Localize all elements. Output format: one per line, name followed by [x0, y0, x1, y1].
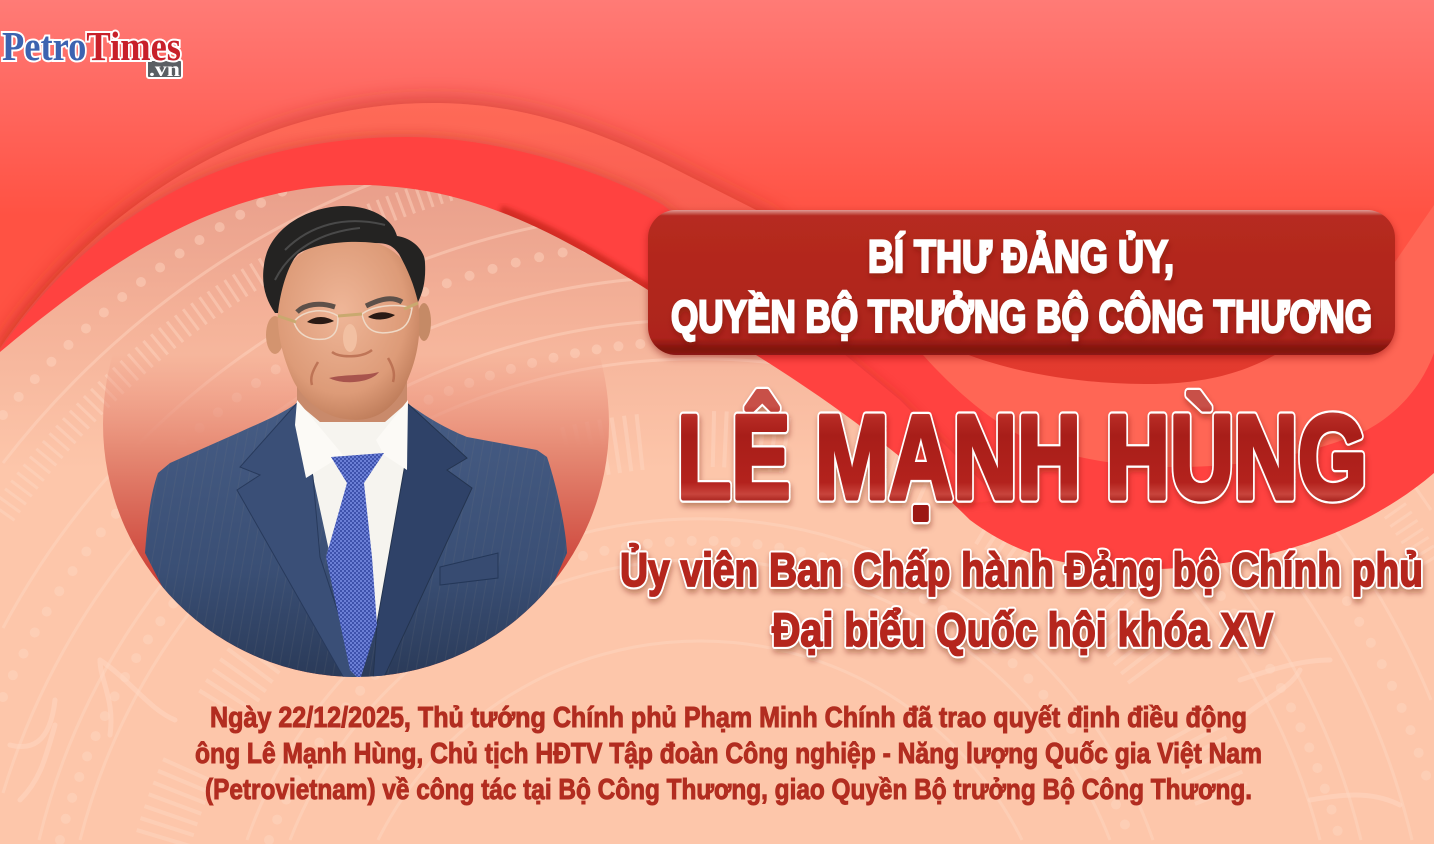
shirt — [296, 402, 412, 680]
left lapel — [237, 403, 360, 680]
glasses bridge and temples — [278, 303, 418, 322]
shirt collar — [295, 400, 408, 478]
necktie — [326, 453, 384, 680]
suit jacket — [145, 403, 567, 680]
paragraph line 1: Ngày 22/12/2025, Thủ tướng Chính phủ Phạm Minh Chính đã trao quyết định điều động — [210, 702, 1247, 734]
background: dark blob under banner — [900, 200, 1310, 384]
portrait — [103, 171, 609, 680]
eyebrows — [297, 299, 402, 312]
background: top gradient — [0, 0, 1434, 400]
subtitle fill line 2: Đại biểu Quốc hội khóa XV — [772, 603, 1274, 656]
paragraph line 3: (Petrovietnam) về công tác tại Bộ Công Thương, giao Quyền Bộ trưởng Bộ Công Thương. — [205, 774, 1252, 806]
background: drum bird motifs — [10, 660, 1400, 805]
subtitle — [620, 543, 1423, 656]
logo wordmark: PetroTimes — [2, 23, 181, 69]
logo tag .vn — [147, 60, 182, 78]
logo text .vn: .vn — [149, 59, 180, 81]
right ear — [419, 303, 431, 341]
eyes — [307, 312, 395, 324]
suit pocket — [440, 553, 498, 585]
nose highlight — [343, 324, 357, 352]
banner: role — [648, 210, 1395, 355]
nose shading — [311, 350, 394, 385]
background: bronze-drum pattern — [0, 185, 1434, 844]
suit pinstripes — [146, 487, 566, 676]
paragraph line 2: ông Lê Mạnh Hùng, Chủ tịch HĐTV Tập đoàn Công nghiệp - Năng lượng Quốc gia Việt Nam — [195, 738, 1262, 770]
banner line 1: BÍ THƯ ĐẢNG ỦY, — [868, 231, 1174, 282]
mouth — [329, 372, 379, 382]
hair — [263, 206, 425, 313]
right lapel — [373, 403, 472, 680]
glasses lenses — [294, 306, 412, 339]
background: peach wave — [0, 185, 1434, 844]
hair highlights — [275, 221, 385, 280]
portrait figure — [145, 206, 567, 680]
portrait backdrop disc — [103, 171, 609, 677]
background: red wave — [0, 137, 1000, 600]
name heading — [677, 391, 1367, 524]
head — [278, 239, 419, 420]
background: wave edge shading — [500, 211, 648, 290]
left ear — [266, 316, 282, 354]
description paragraph — [195, 702, 1262, 806]
subtitle outline line 2: Đại biểu Quốc hội khóa XV — [772, 603, 1274, 656]
glasses — [278, 303, 418, 339]
background: lighter wave band — [0, 103, 800, 600]
neck — [297, 382, 407, 422]
banner box — [648, 210, 1395, 355]
background: coral blob right — [850, 190, 1434, 467]
logo: PetroTimes.vn — [2, 23, 182, 81]
